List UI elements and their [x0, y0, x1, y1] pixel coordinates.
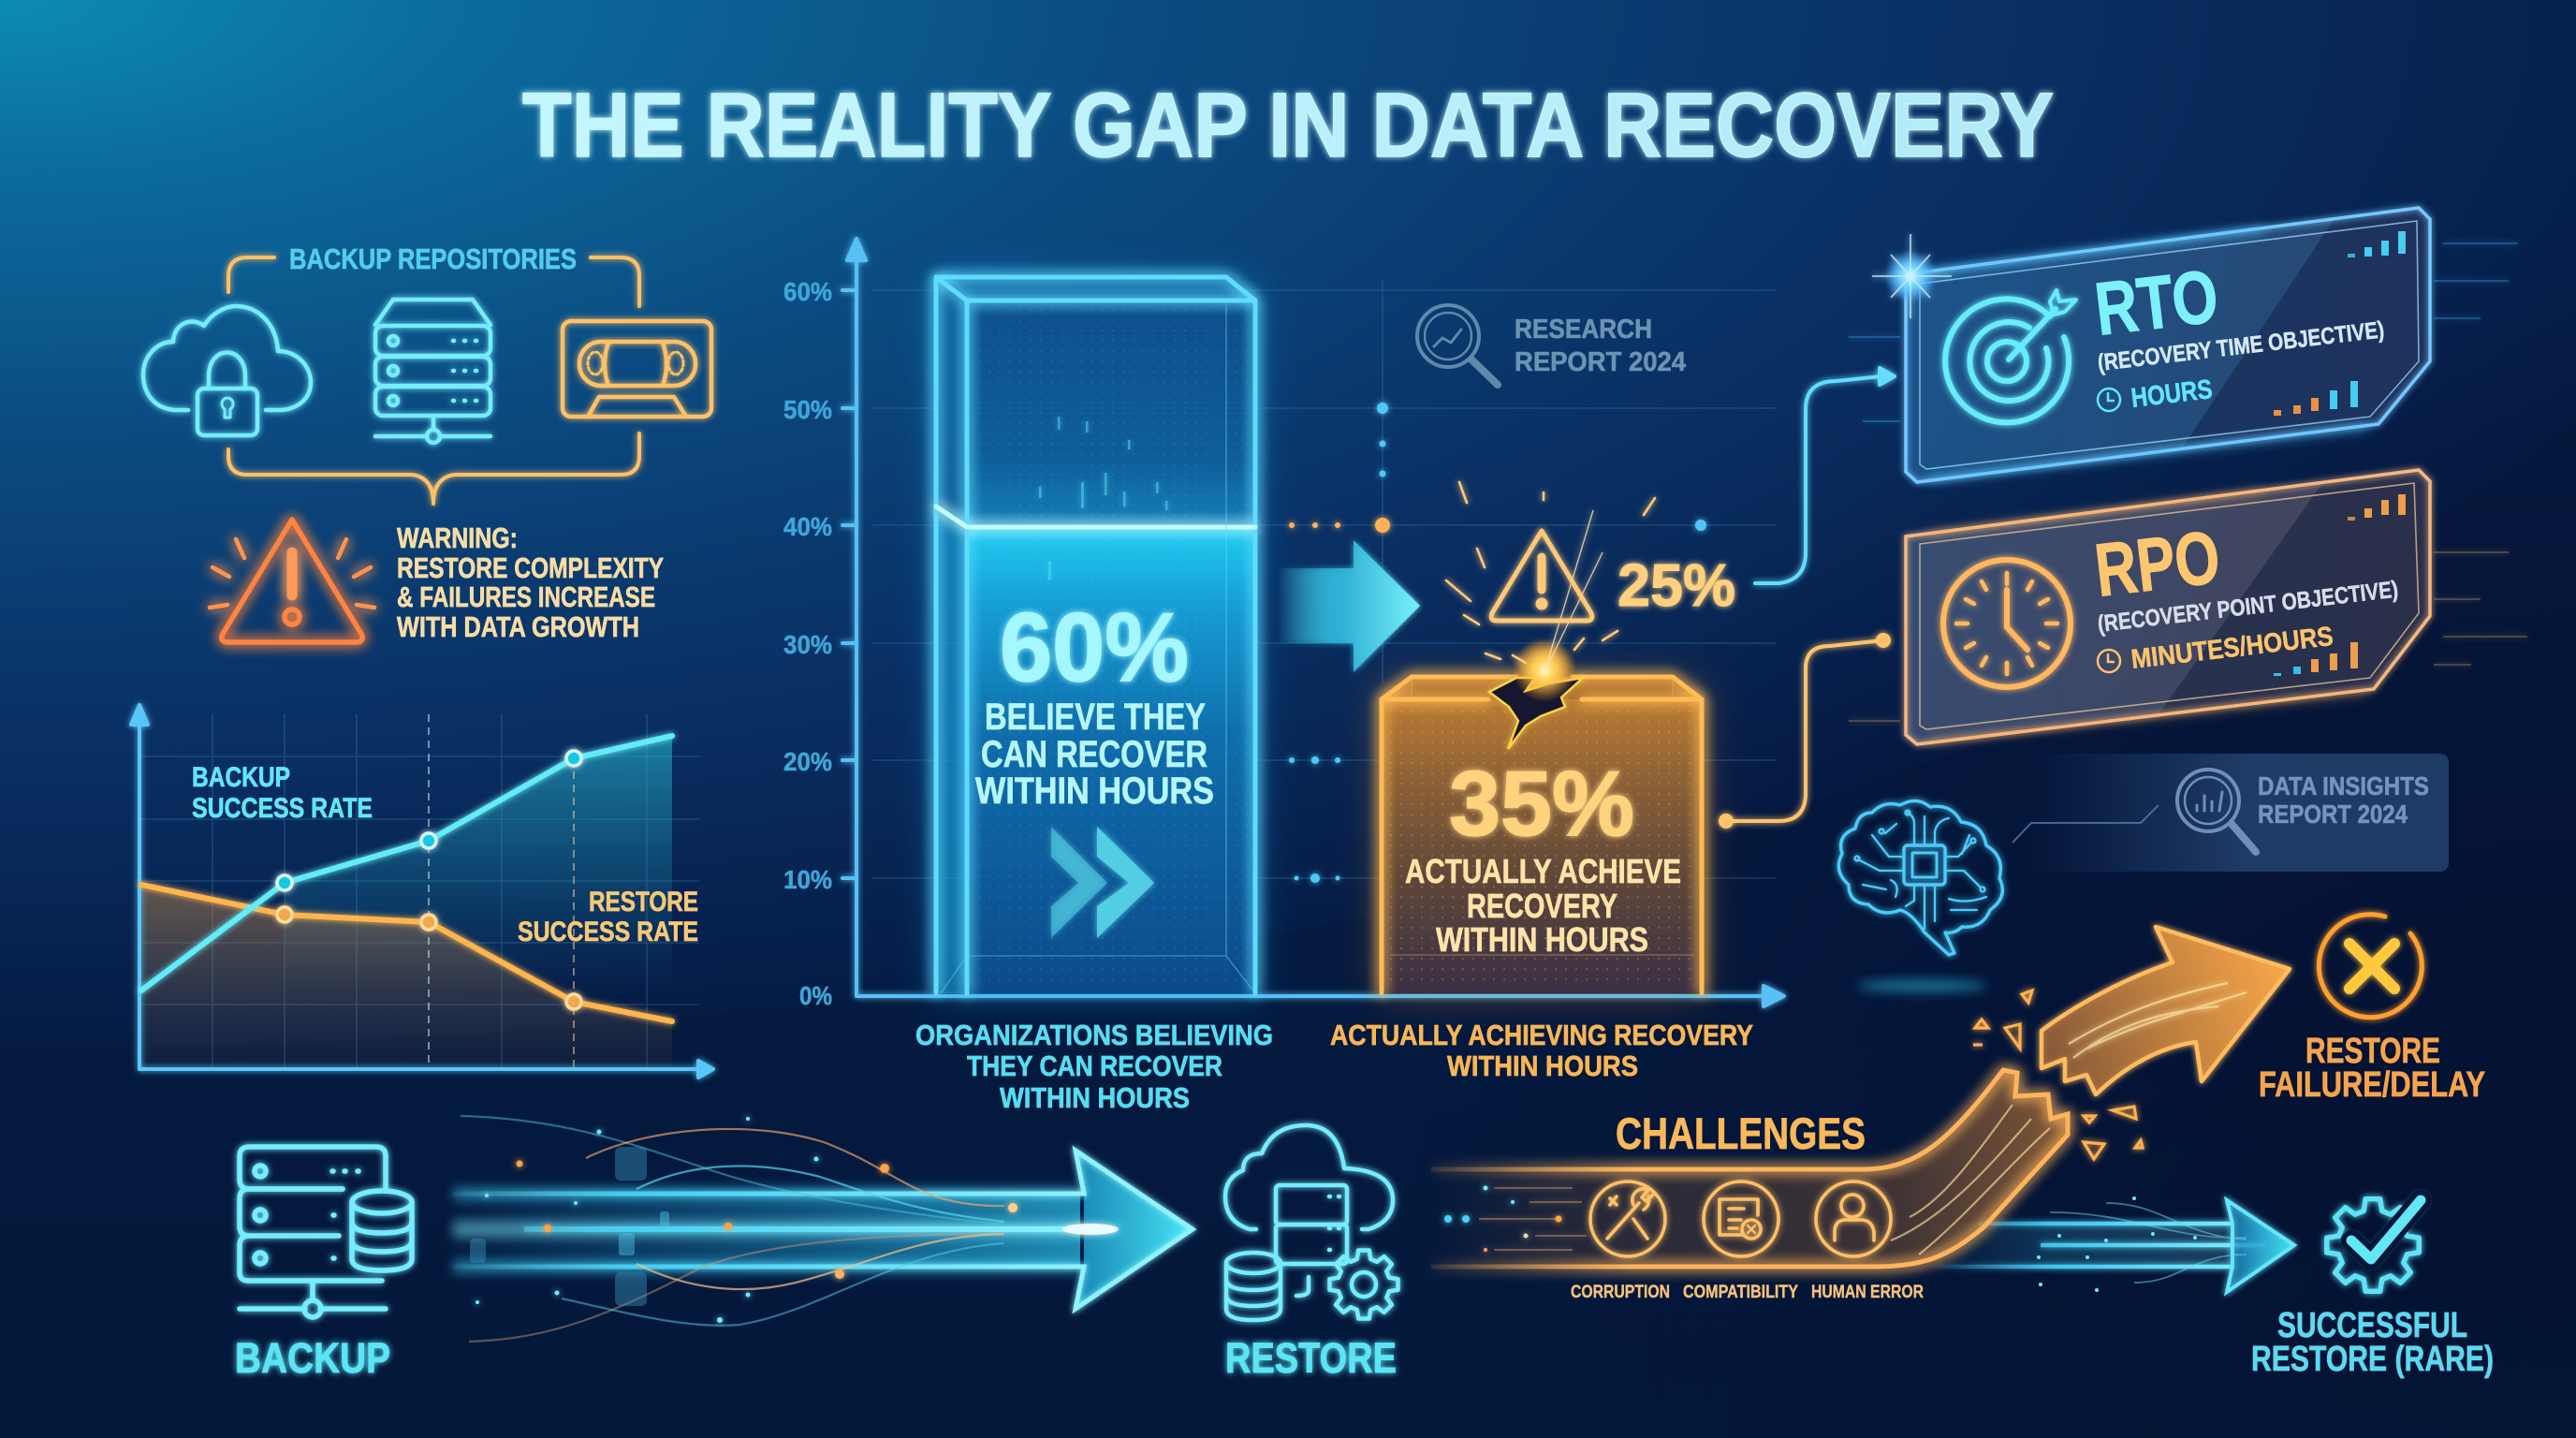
arrow: belief to reality — [1278, 540, 1420, 672]
connector: 25% to RTO — [1755, 368, 1895, 583]
backup line — [141, 736, 672, 990]
icon: magnifier — [2177, 770, 2256, 852]
mini bars — [2274, 231, 2406, 416]
label: backup success rate: SUCCESS RATE — [192, 793, 373, 824]
axis labels: 30% — [783, 630, 832, 659]
line chart: backup vs restore success rate — [131, 705, 713, 1078]
bar: 35 percent reality — [1382, 482, 1702, 993]
restore line — [141, 885, 672, 1021]
text: research report 2024: REPORT 2024 — [1515, 347, 1686, 377]
caption: organizations believing: WITHIN HOURS — [1000, 1081, 1190, 1114]
broken lower path band — [1431, 1070, 2068, 1267]
description: actually achieve recovery: ACTUALLY ACHIEVE — [1405, 852, 1681, 890]
crack and spark — [1446, 482, 1655, 749]
warning text: WITH DATA GROWTH — [397, 610, 639, 643]
caption: actually achieving — [1330, 1019, 1753, 1082]
caption: organizations believing: THEY CAN RECOVER — [967, 1049, 1222, 1082]
RPO definition: (RECOVERY POINT OBJECTIVE) — [2096, 576, 2399, 638]
icon: AI brain — [1838, 800, 2002, 955]
axis labels: 10% — [783, 865, 832, 894]
challenge labels: COMPATIBILITY — [1683, 1283, 1798, 1302]
bar: 60 percent belief — [936, 277, 1255, 994]
text: data insights — [2258, 771, 2429, 829]
description: actually achieve recovery: WITHIN HOURS — [1436, 920, 1648, 959]
RTO unit: hours: HOURS — [2130, 374, 2214, 414]
data streams — [461, 1116, 1004, 1342]
icon: backup server with database — [240, 1147, 412, 1317]
label: backup: BACKUP — [235, 1334, 390, 1382]
description: believe they can recover: WITHIN HOURS — [975, 770, 1214, 812]
heading: backup repositories: BACKUP REPOSITORIES — [289, 242, 577, 275]
value: 60%: 60% — [1000, 594, 1189, 702]
axis labels: 0% — [799, 981, 832, 1010]
label: restore success rate — [518, 887, 698, 947]
marker dots — [1289, 403, 1706, 883]
label: backup success rate — [192, 762, 373, 824]
text: research report 2024: RESEARCH — [1515, 315, 1652, 345]
incoming particle traces — [1444, 1185, 1587, 1252]
connector: 35% to RPO — [1720, 635, 1889, 827]
cyan area — [285, 736, 672, 992]
RTO unit: hours — [2098, 374, 2214, 414]
warning text: RESTORE COMPLEXITY — [397, 551, 664, 584]
panel: RTO — [1849, 208, 2518, 482]
label: successful restore: SUCCESSFUL — [2277, 1306, 2467, 1345]
panel: RPO — [1849, 470, 2527, 744]
icon: human error person — [1816, 1181, 1891, 1256]
text: data insights: DATA INSIGHTS — [2258, 771, 2429, 800]
RTO definition: (RECOVERY TIME OBJECTIVE) — [2096, 316, 2386, 376]
caption: actually achieving: WITHIN HOURS — [1447, 1049, 1638, 1082]
icon: warning triangle small — [1491, 531, 1592, 621]
label: restore success rate: RESTORE — [589, 887, 698, 917]
caption: actually achieving: ACTUALLY ACHIEVING RECOVERY — [1330, 1019, 1753, 1051]
icon: compatibility document — [1704, 1181, 1778, 1256]
warning text — [397, 521, 664, 643]
bracket frame — [228, 257, 639, 504]
description: actually achieve recovery: RECOVERY — [1467, 887, 1617, 925]
axis labels: 60% — [783, 277, 832, 306]
label: restore failure/delay: FAILURE/DELAY — [2259, 1065, 2485, 1105]
caption: organizations believing: ORGANIZATIONS BELIEVING — [915, 1019, 1273, 1051]
icon: research report magnifier — [1417, 305, 1498, 385]
icon: successful gear check — [2327, 1199, 2421, 1291]
description: believe they can recover — [975, 697, 1214, 812]
axis labels: 40% — [783, 512, 832, 541]
icon: target — [1945, 290, 2076, 422]
flow: challenges to restore failure — [1431, 915, 2494, 1379]
axis labels — [783, 277, 832, 1010]
description: believe they can recover: BELIEVE THEY — [985, 697, 1206, 738]
mini bars — [2274, 494, 2406, 676]
label: successful restore: RESTORE (RARE) — [2251, 1340, 2494, 1379]
icon: restore cloud, server, database, gear — [1225, 1125, 1398, 1320]
value: 35%: 35% — [1449, 752, 1634, 855]
icon: restore failure X — [2319, 915, 2422, 1018]
icon: cloud with lock — [143, 306, 311, 435]
value: 25%: 25% — [1617, 551, 1735, 619]
icon: server rack — [375, 300, 490, 443]
orange area — [141, 885, 672, 1069]
label: restore failure/delay: RESTORE — [2305, 1032, 2440, 1071]
panel: data insights report — [2012, 754, 2449, 872]
icon: double chevron — [1051, 827, 1154, 938]
icon: tape cassette — [563, 321, 711, 417]
arrow: backup to restore — [453, 1116, 1193, 1342]
sparkle particles — [476, 1117, 1017, 1323]
axes — [842, 239, 1784, 1006]
challenge labels: HUMAN ERROR — [1811, 1283, 1924, 1302]
label: restore failure/delay — [2259, 1032, 2485, 1105]
caption: organizations believing — [915, 1019, 1273, 1114]
corner star flare — [1872, 234, 1952, 318]
challenge labels — [1571, 1283, 1924, 1302]
icon: corruption tools — [1590, 1181, 1665, 1256]
cyan success arrow — [1922, 1196, 2294, 1292]
RPO heading: RPO — [2091, 515, 2224, 612]
RTO heading: RTO — [2091, 254, 2222, 351]
panel: backup repositories — [143, 242, 711, 643]
axes — [131, 705, 713, 1078]
warning text: WARNING: — [397, 521, 518, 554]
label: restore: RESTORE — [1225, 1334, 1397, 1382]
broken path fragments — [1973, 990, 2143, 1159]
label: restore success rate: SUCCESS RATE — [518, 917, 698, 947]
text: research report 2024 — [1515, 315, 1686, 377]
title: THE REALITY GAP IN DATA RECOVERY — [522, 74, 2054, 176]
floating data blocks — [470, 1147, 669, 1306]
label: backup success rate: BACKUP — [192, 762, 290, 793]
warning text: & FAILURES INCREASE — [397, 580, 655, 613]
challenge labels: CORRUPTION — [1571, 1283, 1670, 1302]
description: actually achieve recovery — [1405, 852, 1681, 959]
icon: clock — [1943, 560, 2071, 687]
orange failure arrow — [2042, 927, 2290, 1094]
glow under brain — [1856, 980, 1987, 991]
icon: warning triangle — [210, 520, 374, 642]
heading: challenges: CHALLENGES — [1616, 1108, 1866, 1158]
label: successful restore — [2251, 1306, 2494, 1379]
text: data insights: REPORT 2024 — [2258, 800, 2408, 829]
flow: backup to restore — [235, 1116, 1398, 1382]
axis labels: 50% — [783, 395, 832, 424]
axis labels: 20% — [783, 747, 832, 776]
RPO unit: minutes/hours: MINUTES/HOURS — [2130, 622, 2334, 675]
description: believe they can recover: CAN RECOVER — [981, 734, 1208, 775]
bar chart: belief vs reality — [783, 239, 1784, 1114]
